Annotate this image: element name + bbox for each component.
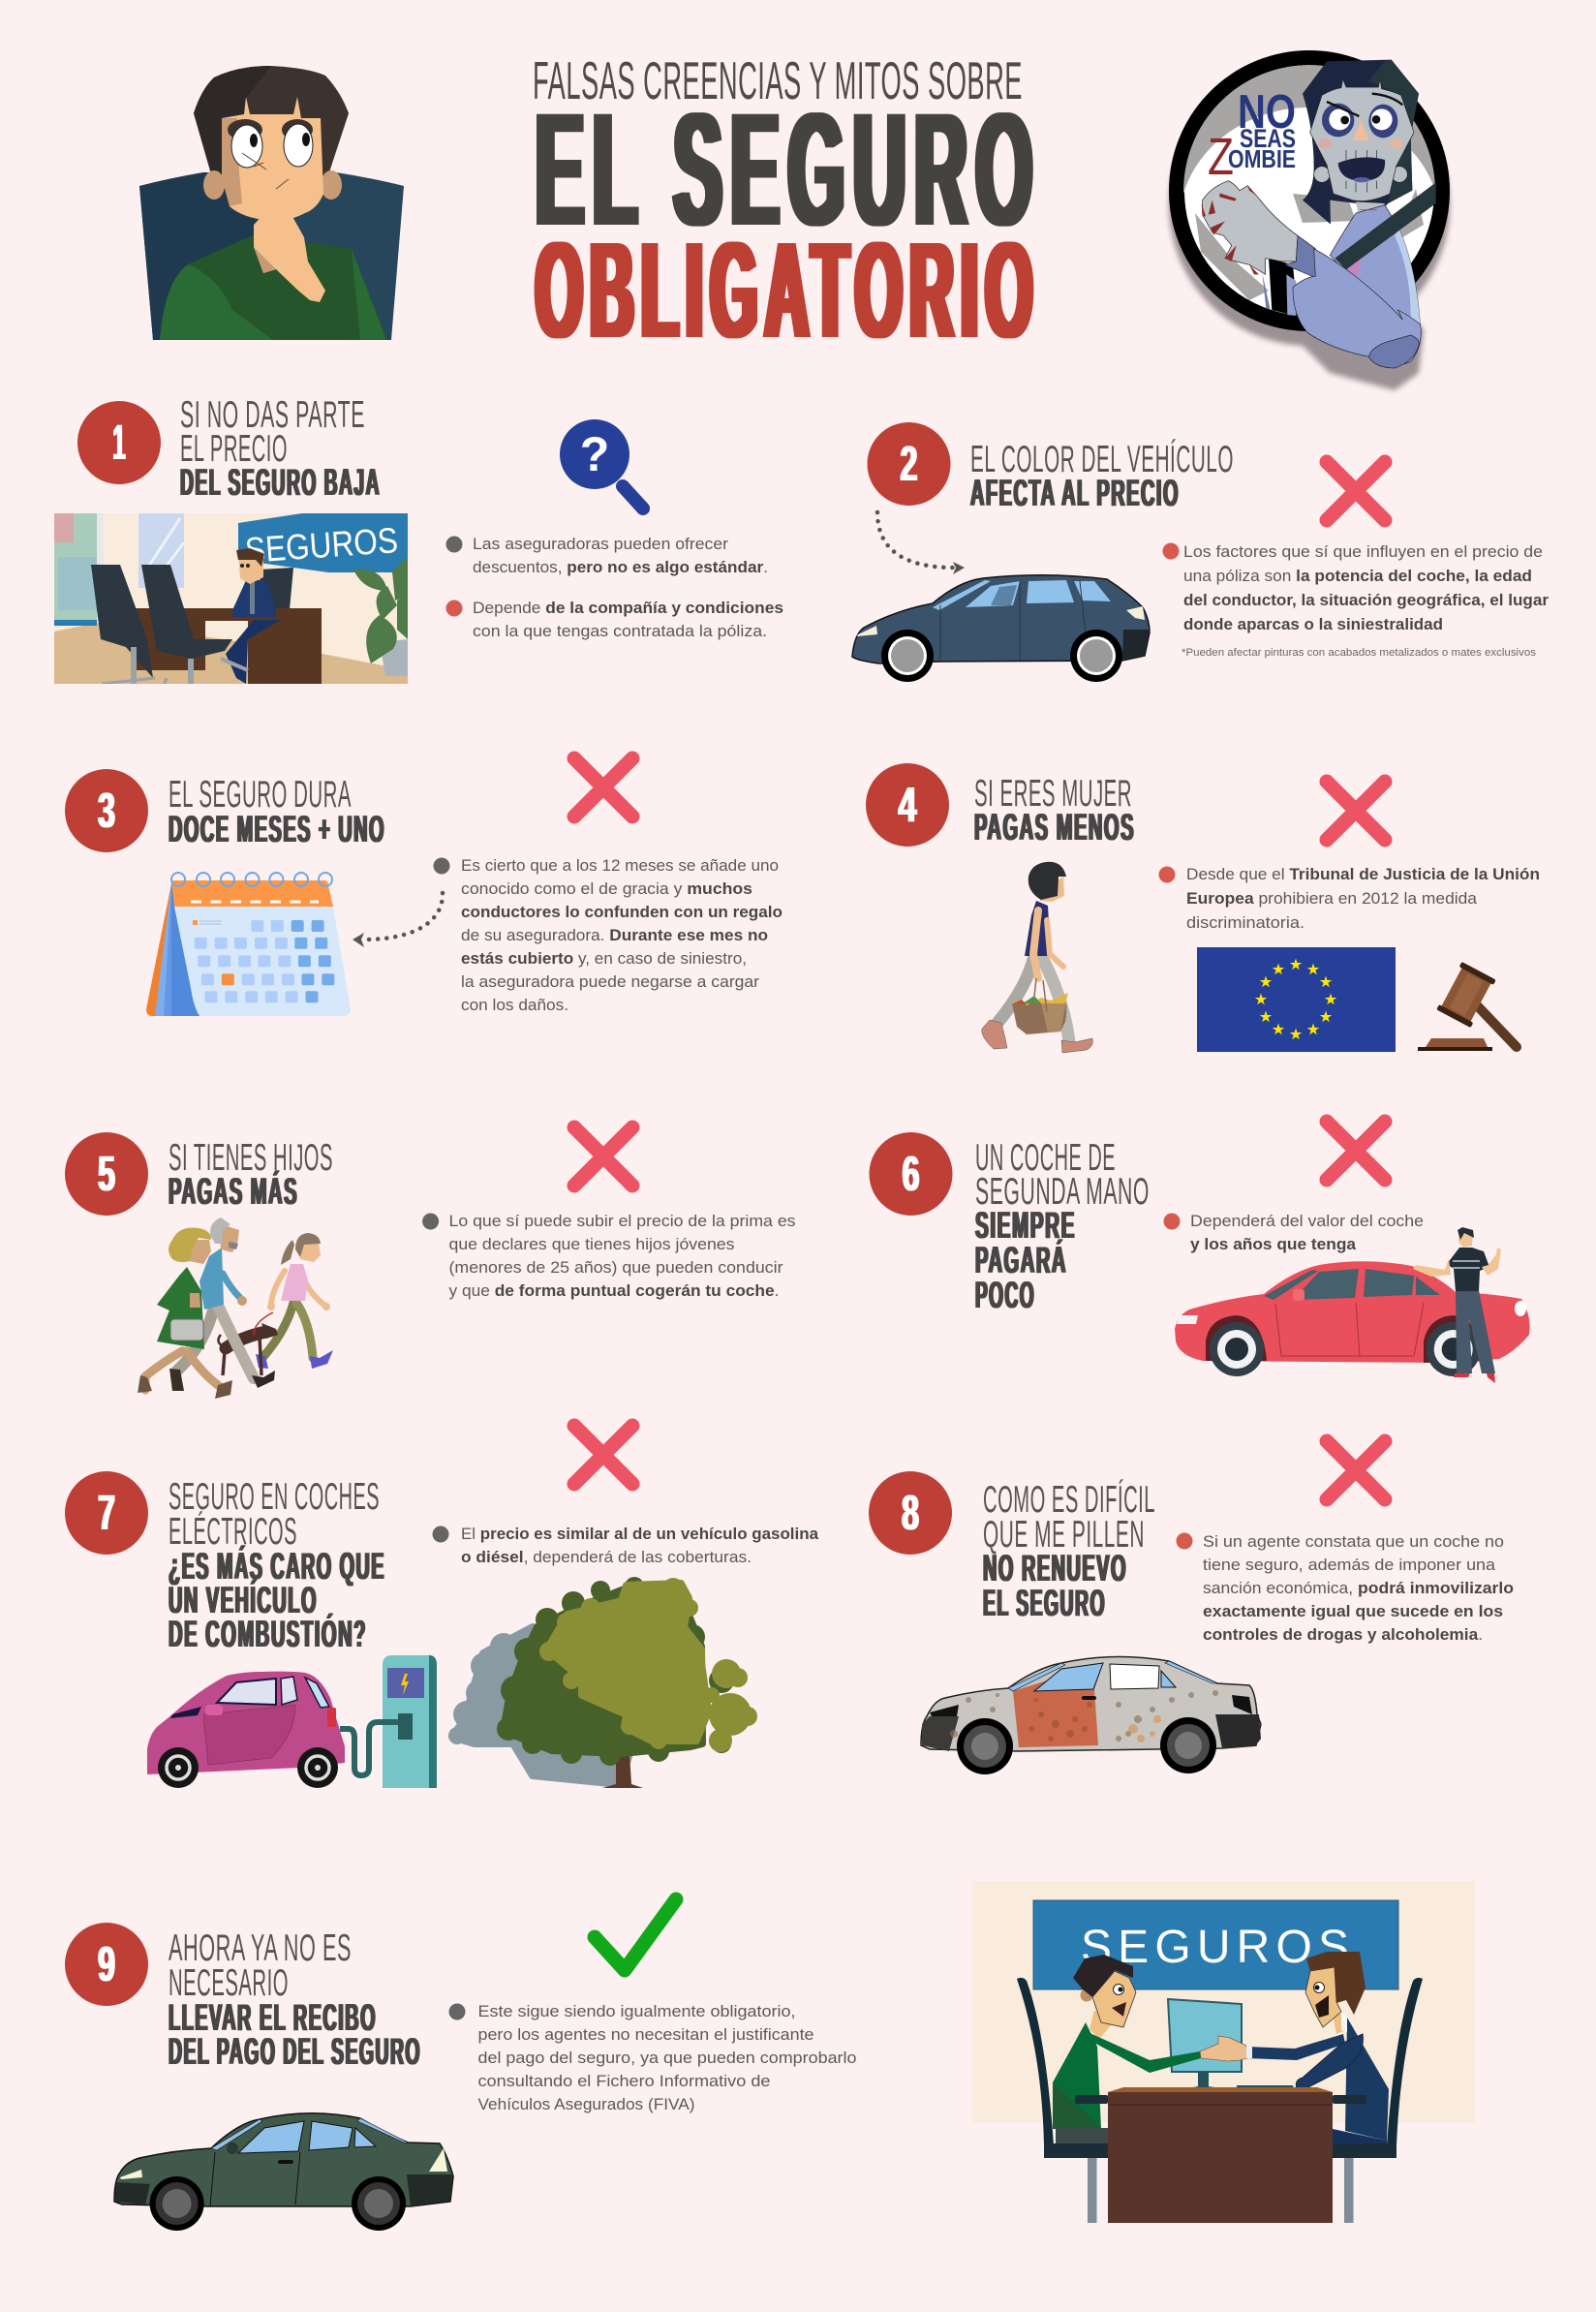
text block 2: del conductor, la situación geográfica, el lugar (1183, 591, 1549, 609)
badge text: SEAS (1240, 124, 1296, 153)
heading 6: POCO (975, 1275, 1035, 1316)
icon: cross (1327, 1122, 1385, 1180)
heading 2: EL COLOR DEL VEHÍCULO (970, 439, 1234, 480)
section 9 (65, 1881, 1475, 2231)
text block 4 (1158, 865, 1540, 932)
section 2 (852, 422, 1549, 682)
heading 9: NECESARIO (169, 1962, 289, 2004)
illustration: blue car (852, 575, 1150, 682)
number badge 5: 5 (98, 1146, 115, 1201)
heading 3 (169, 774, 385, 850)
text block 5: y que de forma puntual cogerán tu coche . (449, 1281, 779, 1300)
illustration: electric car charging (147, 1655, 437, 1788)
section 4 (866, 763, 1540, 1053)
badge text (1208, 86, 1296, 186)
text block 5: que declares que tienes hijos jóvenes (449, 1235, 734, 1253)
arrow: dotted to car (877, 512, 965, 574)
heading 7: DE COMBUSTIÓN? (169, 1613, 367, 1655)
heading 4: SI ERES MUJER (974, 773, 1132, 815)
illustration: handshake at insurance desk (972, 1881, 1475, 2223)
text block 3: estás cubierto y, en caso de siniestro, (461, 949, 747, 968)
text block 9: Este sigue siendo igualmente obligatorio, (478, 2002, 796, 2020)
illustration: family walking (138, 1218, 333, 1399)
heading 7: UN VEHÍCULO (169, 1579, 318, 1621)
heading 8: COMO ES DIFÍCIL (983, 1479, 1155, 1521)
icon: cross (1327, 1441, 1385, 1499)
number badge 7: 7 (98, 1485, 115, 1540)
text block 9 (449, 2002, 856, 2113)
heading 8 (983, 1479, 1155, 1624)
section 5 (65, 1127, 796, 1399)
text block 8: Si un agente constata que un coche no (1203, 1532, 1504, 1551)
heading 6: SIEMPRE (975, 1205, 1076, 1247)
badge text: Z (1208, 128, 1234, 186)
icon: cross (1327, 782, 1385, 840)
heading 1 (180, 394, 381, 504)
text block 2: donde aparcas o la siniestralidad (1183, 615, 1443, 633)
number badge 3 (65, 769, 148, 852)
sign text: SEGUROS (244, 520, 399, 570)
text block 8 (1176, 1532, 1514, 1644)
section 1: DEL SEGURO BAJA (180, 462, 381, 504)
number badge 8: 8 (902, 1485, 919, 1540)
text block 4: Europea prohibiera en 2012 la medida (1186, 889, 1478, 908)
illustration: calendar (146, 873, 351, 1016)
text block 8: sanción económica, podrá inmovilizarlo (1203, 1579, 1514, 1597)
icon: check mark (595, 1899, 676, 1970)
text block 2: Los factores que sí que influyen en el precio de (1183, 542, 1543, 561)
number badge 1: 1 (112, 415, 126, 470)
section 7 (65, 1426, 819, 1788)
heading 4 (974, 773, 1135, 848)
heading 7 (169, 1476, 385, 1655)
text block 4: Desde que el Tribunal de Justicia de la Unión (1186, 865, 1540, 883)
section 8 (869, 1441, 1514, 1774)
number badge 6 (870, 1132, 953, 1216)
section 3 (65, 758, 783, 1016)
text block 6: Dependerá del valor del coche (1190, 1212, 1424, 1230)
badge: no seas zombie (1169, 58, 1450, 390)
heading 9: AHORA YA NO ES (169, 1927, 352, 1969)
illustration: red car and man (1175, 1227, 1530, 1383)
text block 1: con la que tengas contratada la póliza. (473, 622, 767, 640)
heading 1: SI NO DAS PARTE (180, 394, 365, 436)
heading 6: PAGARÁ (975, 1239, 1067, 1281)
title: FALSAS CREENCIAS Y MITOS SOBRE (533, 50, 1023, 110)
dog (218, 1312, 278, 1375)
heading 7: SEGURO EN COCHES (169, 1476, 380, 1518)
heading 2 (970, 439, 1234, 514)
footnote: *Pueden afectar pinturas con acabados metalizados o mates exclusivos (1182, 647, 1537, 659)
icon: cross (574, 1426, 632, 1484)
heading 8: EL SEGURO (983, 1583, 1106, 1624)
text block 9: Vehículos Asegurados (FIVA) (478, 2095, 695, 2113)
text block 3: la aseguradora puede negarse a cargar (461, 972, 759, 991)
text block 1 (445, 535, 783, 640)
section 9: DEL PAGO DEL SEGURO (169, 2031, 421, 2073)
number badge 8 (869, 1471, 952, 1555)
icon: gavel (1418, 962, 1517, 1051)
icon: cross (574, 1127, 632, 1186)
text block 3: de su aseguradora. Durante ese mes no (461, 926, 768, 944)
woman (138, 1228, 232, 1399)
heading 6: UN COCHE DE (975, 1137, 1116, 1179)
illustration: woman with shopping bag (982, 862, 1092, 1053)
text block 1: descuentos, pero no es algo estándar. (473, 558, 768, 576)
text block 9: pero los agentes no necesitan el justificante (478, 2025, 813, 2044)
text block 5 (422, 1212, 796, 1300)
heading 1: EL PRECIO (180, 428, 288, 470)
text block 8: exactamente igual que sucede en los (1203, 1602, 1503, 1620)
text block 9: del pago del seguro, ya que pueden comprobarlo (478, 2049, 856, 2067)
heading 6 (975, 1137, 1150, 1316)
heading 5 (169, 1137, 333, 1213)
heading 7: ¿ES MÁS CARO QUE (169, 1545, 385, 1588)
text block 7: El precio es similar al de un vehículo gasolina (461, 1525, 819, 1543)
title (533, 50, 1041, 366)
text block 6 (1164, 1212, 1424, 1253)
text block 1: Las aseguradoras pueden ofrecer (473, 535, 728, 553)
heading 6: SEGUNDA MANO (975, 1171, 1150, 1213)
number badge 7 (65, 1471, 148, 1555)
text block 6: y los años que tenga (1190, 1235, 1357, 1253)
number badge 9: 9 (98, 1936, 115, 1991)
illustration: rusty car (921, 1656, 1261, 1774)
heading 2: AFECTA AL PRECIO (970, 473, 1180, 514)
number badge 1 (77, 401, 161, 484)
number badge 2: 2 (901, 436, 918, 491)
heading 8: NO RENUEVO (983, 1548, 1127, 1589)
text block 7: o diésel, dependerá de las coberturas. (461, 1548, 752, 1566)
number badge 6: 6 (903, 1146, 920, 1201)
heading 8: QUE ME PILLEN (983, 1514, 1145, 1556)
text block 3: con los daños. (461, 996, 568, 1014)
text block 8: controles de drogas y alcoholemia . (1203, 1625, 1483, 1644)
badge text: OMBIE (1228, 144, 1296, 173)
icon: cross (574, 758, 632, 817)
heading 4: PAGAS MENOS (974, 807, 1135, 848)
text block 7 (432, 1525, 819, 1566)
illustration: EU flag (1197, 947, 1396, 1052)
text block 3: conductores lo confunden con un regalo (461, 903, 783, 921)
text block 2 (1162, 542, 1549, 659)
illustration: insurance office (54, 513, 408, 684)
heading 7: ELÉCTRICOS (169, 1511, 297, 1553)
icon: magnifier question: ? (580, 427, 609, 481)
text block 4: discriminatoria. (1186, 913, 1304, 932)
heading 5: SI TIENES HIJOS (169, 1137, 333, 1179)
number badge 9 (65, 1923, 148, 2006)
text block 5: (menores de 25 años) que pueden conducir (449, 1258, 783, 1277)
number badge 4: 4 (899, 777, 917, 832)
man (169, 1218, 275, 1391)
arrow: dotted to calendar (353, 893, 443, 947)
heading 9: LLEVAR EL RECIBO (169, 1997, 377, 2039)
illustration: green car (114, 2113, 453, 2231)
text block 3: Es cierto que a los 12 meses se añade uno (461, 856, 779, 875)
heading 3: DOCE MESES + UNO (169, 809, 385, 850)
icon: cross (1327, 462, 1385, 520)
illustration: thinking man (139, 66, 404, 340)
number badge 5 (65, 1132, 148, 1216)
heading 9 (169, 1927, 421, 2073)
number badge 3: 3 (98, 783, 115, 838)
section 6 (870, 1122, 1530, 1383)
girl (256, 1233, 333, 1369)
text block 3: conocido como el de gracia y muchos (461, 879, 752, 898)
text block 2: una póliza son la potencia del coche, la edad (1183, 567, 1532, 585)
sign text: SEGUROS (1081, 1922, 1349, 1973)
number badge 4 (866, 763, 949, 847)
text block 1: Depende de la compañía y condiciones (473, 599, 783, 617)
text block 8: tiene seguro, además de imponer una (1203, 1556, 1496, 1574)
text block 3 (434, 856, 783, 1014)
illustration: tree with shadow (448, 1577, 757, 1788)
heading 3: EL SEGURO DURA (169, 774, 352, 816)
section 1 (54, 394, 783, 684)
text block 5: Lo que sí puede subir el precio de la prima es (449, 1212, 796, 1230)
number badge 2 (868, 422, 951, 506)
text block 9: consultando el Fichero Informativo de (478, 2072, 771, 2090)
icon: magnifier question (560, 419, 643, 509)
badge text: NO (1238, 86, 1296, 139)
heading 5: PAGAS MÁS (169, 1170, 298, 1213)
